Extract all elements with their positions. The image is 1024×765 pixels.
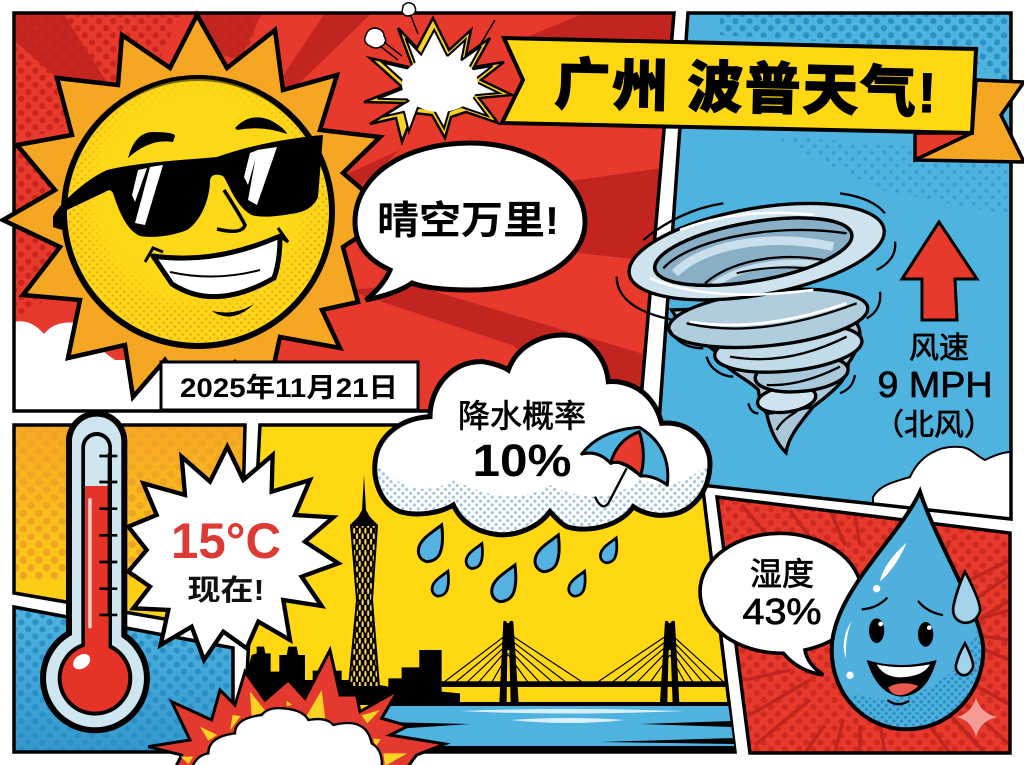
- comic burst: [364, 3, 512, 142]
- cloud: lower left corner: [16, 321, 115, 360]
- sun disk: [64, 78, 332, 346]
- date label: [161, 362, 418, 410]
- panel: wind blue background: [650, 13, 1015, 525]
- sunglasses: [53, 135, 323, 237]
- sun character: [3, 15, 392, 398]
- tornado: [617, 187, 895, 453]
- precipitation value: 10%: [472, 435, 572, 486]
- rain cloud with umbrella: [375, 335, 710, 540]
- thermometer: [40, 411, 150, 733]
- water drop character: [832, 492, 990, 733]
- title banner: [502, 38, 1024, 162]
- smile: [153, 236, 280, 297]
- wind speed text: 9 MPH: [878, 364, 992, 405]
- water: [380, 702, 736, 753]
- umbrella: [582, 427, 668, 506]
- speech bubble: humidity: [700, 533, 862, 675]
- now label: 现在!: [188, 574, 264, 607]
- eyebrows: [128, 117, 287, 158]
- puffs: [365, 3, 416, 48]
- banner ribbon: [502, 38, 976, 133]
- ribbon tail: [915, 80, 1024, 162]
- precipitation label: 降水概率: [458, 398, 586, 434]
- panel: humidity red background: [717, 497, 1012, 755]
- bridge: [442, 621, 727, 703]
- panel: sunny red background: [14, 13, 674, 413]
- skyline: [240, 647, 460, 720]
- humidity value: 43%: [742, 591, 822, 632]
- title: 广州 波普天气!: [554, 53, 937, 124]
- Canton tower: [348, 475, 380, 687]
- panel: blue halftone behind thermometer: [14, 607, 234, 753]
- sun rays: [3, 15, 392, 398]
- wind speed text: 风速: [909, 332, 969, 365]
- wind direction arrow: [902, 222, 977, 320]
- temperature burst: [128, 447, 338, 660]
- bubble text: 晴空万里!: [377, 200, 559, 243]
- temperature reading: 15°C: [171, 513, 281, 569]
- wind speed text: [874, 332, 994, 442]
- wind speed text: （北风）: [874, 409, 994, 442]
- panel: orange halftone behind thermometer: [16, 426, 244, 618]
- date label: 2025年11月21日: [180, 373, 398, 403]
- raindrops: [418, 525, 617, 602]
- explosion at bottom: [148, 650, 445, 765]
- humidity label: 湿度: [750, 556, 814, 592]
- cloud: lower right of wind panel: [873, 447, 1011, 525]
- lens glints: [132, 147, 277, 225]
- speech bubble: clear sky: [355, 143, 585, 300]
- nose: [217, 190, 245, 231]
- panel: yellow city scene: [240, 425, 736, 753]
- sparkle: [957, 697, 997, 737]
